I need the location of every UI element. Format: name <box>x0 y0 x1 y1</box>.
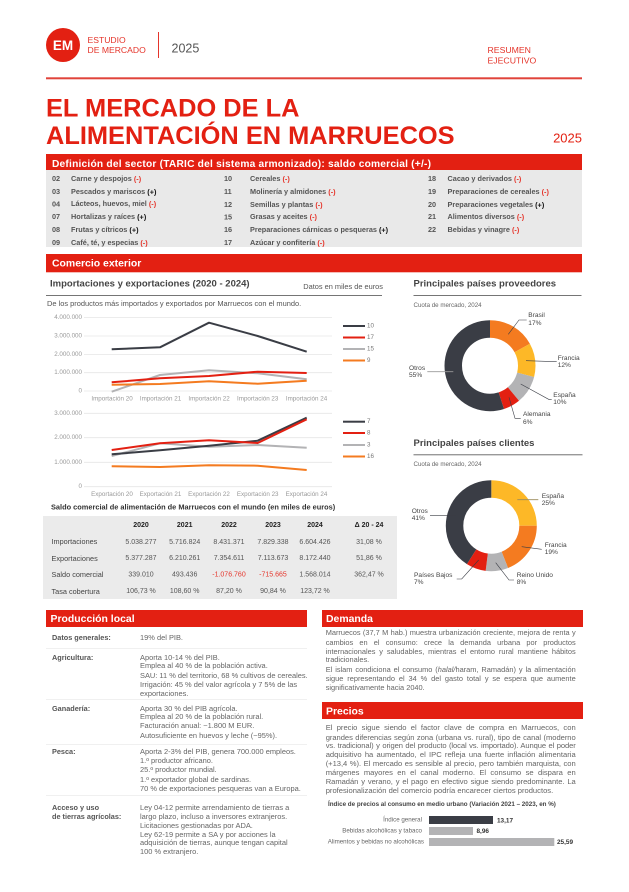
text: demand: tradicionales. <box>326 655 369 664</box>
donut chart: suppliers: Francia <box>558 355 580 362</box>
row: general data: Datos generales: <box>52 633 111 642</box>
line chart: exports <box>54 410 374 498</box>
logo: EM circle <box>46 28 80 62</box>
row: coverage: Tasa cobertura <box>52 587 101 596</box>
table header: 2022 <box>221 522 237 529</box>
row: exports: 5.377.287 <box>125 555 157 562</box>
sector list column 1: 08 <box>52 225 60 234</box>
line chart: exports: 2.000.000 <box>54 434 83 441</box>
sector list column 1 <box>52 174 157 247</box>
text: demand: internacionales y saludables, mientras el entorno rural mantiene hábitos <box>326 647 576 656</box>
row: agriculture <box>52 653 308 698</box>
row: livestock: Aporta 30 % del PIB agrícola. <box>140 704 238 713</box>
legend: exports: 7 <box>367 418 371 425</box>
table header: 2020 <box>133 522 149 529</box>
bar chart: price index: Alimentos y bebidas no alcohólicas <box>328 838 424 846</box>
row: agriculture: Irrigación: 45 % del valor agrícola y 7 5% de las <box>140 680 297 689</box>
sector list column 2: 17 <box>224 238 232 247</box>
donut chart: customers: España <box>542 493 564 500</box>
line chart: exports: Exportación 24 <box>286 491 328 498</box>
row: exports: Exportaciones <box>52 554 98 563</box>
heading: sector definition <box>46 154 582 170</box>
line chart: imports: Importación 22 <box>188 396 230 402</box>
row: balance: 1.568.014 <box>299 572 331 578</box>
heading: prices <box>322 702 583 719</box>
row: land access <box>52 803 290 856</box>
row: agriculture: Emplea al 40 % de la población activa. <box>140 661 268 670</box>
sector list column 2: Cereales (-) <box>250 174 290 183</box>
row: exports: 51,86 % <box>356 555 382 562</box>
row: balance: 339.010 <box>128 572 154 578</box>
row: land access: largo plazo, incluso a inversores extranjeros. <box>140 812 287 821</box>
row: coverage: 87,20 % <box>216 588 242 595</box>
sector list column 2 <box>224 174 389 247</box>
row: imports: 5.038.277 <box>125 539 157 546</box>
legend: exports <box>343 418 374 460</box>
donut chart: suppliers: Brasil <box>528 312 545 319</box>
row: imports <box>52 537 382 546</box>
sector list column 2: Molinería y almidones (-) <box>250 187 336 196</box>
header <box>46 28 582 79</box>
row: exports: 7.113.673 <box>258 555 288 562</box>
table header: Δ 20 - 24 <box>355 522 383 529</box>
row: land access: adquisición de tierras, aunque tengan capital <box>140 838 288 847</box>
heading: demand <box>322 610 583 627</box>
row: balance: -715.665 <box>259 572 287 578</box>
text: prices: grandes diferencias según zona (urbana vs. rural), tipo de canal (moderno <box>326 733 576 742</box>
donut chart: suppliers: 55% <box>409 372 422 379</box>
sector list column 2: 15 <box>224 212 232 222</box>
sector list column 3: 19 <box>428 187 436 196</box>
bar chart: price index <box>328 816 573 846</box>
row: agriculture: exportaciones. <box>140 689 188 698</box>
table header: 2024 <box>307 522 323 529</box>
line chart: exports: 1.000.000 <box>54 459 83 466</box>
row: coverage: 90,84 % <box>260 588 286 595</box>
donut chart: suppliers: Alemania <box>523 411 551 418</box>
sector list column 1: Carne y despojos (-) <box>71 174 142 183</box>
text: prices: márgenes mayores en el canal moderno. El consumo se dispara en <box>326 768 576 777</box>
legend: exports: 3 <box>367 442 371 448</box>
sector list column 2: 11 <box>224 187 232 196</box>
text: prices: (+13,4 %). El mercado es sensible al precio, pero también marquista, con <box>326 759 576 768</box>
title <box>46 94 455 150</box>
table header: 2023 <box>265 522 281 529</box>
sector list column 3: 20 <box>428 200 436 209</box>
table header <box>133 522 383 529</box>
heading: main customers: Principales países clientes <box>414 438 534 449</box>
note: market share suppliers: Cuota de mercado, 2024 <box>414 302 482 309</box>
panel: sector definition <box>46 154 582 247</box>
text: prices: Ramadán y verano, y el pago en efectivo sigue siendo predominante. La <box>326 777 576 786</box>
donut chart: suppliers: 10% <box>553 399 567 406</box>
text: prices: adquisitivo ha aumentado, el IPC refleja una fuerte inflación alimentaria <box>326 750 576 759</box>
row: livestock: Ganadería: <box>52 704 90 713</box>
row: land access: de tierras agrícolas: <box>52 812 121 821</box>
row: land access: Ley 04-12 permite arrendamiento de tierras a <box>140 803 290 812</box>
line chart: imports: Importación 23 <box>237 396 279 402</box>
heading: prices: Precios <box>326 706 364 718</box>
heading: local production <box>46 610 307 627</box>
row: land access: Acceso y uso <box>52 803 100 812</box>
donut chart: suppliers: España <box>553 392 576 399</box>
donut chart: customers: Otros <box>412 508 429 515</box>
sector list column 2: Azúcar y confitería (-) <box>250 238 325 247</box>
line chart: imports: 0 <box>79 388 83 394</box>
line chart: imports: Importación 20 <box>91 396 133 402</box>
text: demand <box>326 628 582 698</box>
legend: imports: 17 <box>367 334 374 341</box>
donut chart: suppliers: 12% <box>558 362 571 369</box>
sector list column 3: Preparaciones de cereales (-) <box>448 187 549 196</box>
sector list column 1: Frutas y cítricos (+) <box>71 225 139 234</box>
bar chart title: Índice de precios al consumo en medio urbano (Variación 2021 – 2023, en %) <box>328 800 556 808</box>
row: imports: 6.604.426 <box>299 539 331 546</box>
row: coverage: 123,72 % <box>300 588 330 595</box>
row: agriculture: Aporta 10-14 % del PIB. <box>140 653 220 662</box>
row: agriculture: Agricultura: <box>52 653 93 662</box>
table title: Saldo comercial de alimentación de Marruecos con el mundo (en miles de euros) <box>51 502 336 512</box>
sector list column 3: 22 <box>428 225 436 234</box>
sector list column 1: Hortalizas y raíces (+) <box>71 212 147 221</box>
row: balance <box>52 570 384 579</box>
legend: exports: 8 <box>367 430 371 436</box>
row: fishing: 25.º productor mundial. <box>140 765 217 774</box>
row: balance: 493.436 <box>172 572 197 578</box>
heading: main suppliers: Principales países proveedores <box>414 278 556 290</box>
bar chart: price index: 8,96 <box>476 828 489 835</box>
text: demand: sigue representando el 34 % del gasto total y se espera que aumente <box>326 674 576 683</box>
executive summary label: EJECUTIVO <box>488 56 536 66</box>
sector list column 3: Bebidas y vinagre (-) <box>448 225 520 234</box>
sector list column 1: 03 <box>52 187 60 196</box>
panel: local production <box>46 610 308 856</box>
heading: local production: Producción local <box>50 614 135 625</box>
sector list column 1: 04 <box>52 200 61 208</box>
row: livestock: Facturación anual: ~1.800 M EUR. <box>140 721 254 730</box>
donut chart: customers: Francia <box>545 542 567 549</box>
text: demand: Marruecos (37,7 M hab.) muestra urbanización creciente, mejora de renta y <box>326 628 576 637</box>
text: prices <box>326 722 582 798</box>
row: exports: 6.210.261 <box>169 555 200 562</box>
line chart: imports: Importación 21 <box>140 396 182 402</box>
row: land access: 100 % extranjero. <box>140 847 198 856</box>
text: demand: significativamente hacia 2040. <box>326 683 425 692</box>
row: fishing: 1.º productor africano. <box>140 756 213 765</box>
text: demand: El islam condiciona el consumo (halal/haram, Ramadán) y la alimentación <box>326 665 576 674</box>
sector list column 3: 21 <box>428 212 436 221</box>
row: imports: 31,08 % <box>356 539 382 546</box>
line chart: imports <box>54 314 374 402</box>
row: imports: 5.716.824 <box>169 539 200 546</box>
donut chart: customers <box>412 489 567 586</box>
donut chart: suppliers: 17% <box>528 320 542 327</box>
donut chart: customers: 7% <box>414 579 424 586</box>
sector list column 1: Lácteos, huevos, miel (-) <box>71 199 157 208</box>
row: coverage: 108,60 % <box>170 588 199 595</box>
row: imports: 7.829.338 <box>257 539 289 546</box>
donut chart: customers: Países Bajos <box>414 572 453 579</box>
line chart: exports: Exportación 22 <box>188 491 230 498</box>
row: livestock: Emplea al 20 % de la población rural. <box>140 712 263 721</box>
sector list column 1: Café, té, y especias (-) <box>71 238 148 247</box>
donut chart: customers: 25% <box>542 500 555 507</box>
text: prices: profesionalización del comercio podría encarecer ciertos productos. <box>326 786 553 795</box>
logo: EM circle: EM <box>53 38 73 53</box>
donut chart: customers: Reino Unido <box>517 572 553 579</box>
text: demand: cambios en el consumo: crece la demanda urbana por productos <box>326 638 576 647</box>
table header: 2021 <box>177 522 193 529</box>
sector list column 3: Alimentos diversos (-) <box>448 212 525 221</box>
donut chart: suppliers: 6% <box>523 419 533 426</box>
sector list column 2: Grasas y aceites (-) <box>250 212 318 221</box>
heading: foreign trade <box>46 254 582 272</box>
row: general data <box>52 633 183 642</box>
panel: demand <box>322 610 583 698</box>
row: balance: 362,47 % <box>354 572 384 578</box>
row: land access: Ley 62-19 permite a SA y por acciones la <box>140 830 276 839</box>
line chart: imports: 4.000.000 <box>54 314 83 321</box>
study label <box>88 35 146 55</box>
legend: exports: 16 <box>367 453 374 460</box>
row: balance: Saldo comercial <box>52 570 104 579</box>
line chart: exports: 0 <box>79 483 83 490</box>
sector list column 3: Cacao y derivados (-) <box>448 174 522 183</box>
line chart: exports: Exportación 20 <box>91 491 133 498</box>
title: EL MERCADO DE LA <box>46 94 299 122</box>
line chart: exports: Exportación 23 <box>237 491 279 498</box>
sector list column 3 <box>428 174 549 234</box>
sector list column 1: Pescados y mariscos (+) <box>71 187 157 196</box>
chart intro: De los productos más importados y exportados por Marruecos con el mundo. <box>47 299 301 308</box>
legend: imports: 10 <box>367 322 374 329</box>
row: fishing: 70 % de exportaciones pesqueras van a Europa. <box>140 784 301 793</box>
heading: imports and exports: Importaciones y exportaciones (2020 - 2024) <box>50 278 250 290</box>
line chart: exports: Exportación 21 <box>140 491 182 498</box>
donut chart: customers: 41% <box>412 515 425 522</box>
sector list column 3: 18 <box>428 174 436 183</box>
sector list column 2: 16 <box>224 225 232 234</box>
row: general data: 19% del PIB. <box>140 633 183 642</box>
row: livestock <box>52 704 277 740</box>
row: coverage <box>52 587 330 596</box>
line chart: imports: 3.000.000 <box>54 332 83 340</box>
executive summary label: RESUMEN <box>488 45 531 55</box>
row: exports: 8.172.440 <box>299 555 331 562</box>
sector list column 2: Preparaciones cárnicas o pesqueras (+) <box>250 225 389 234</box>
row: imports: 8.431.371 <box>213 539 245 546</box>
sector list column 1: 07 <box>52 212 60 221</box>
row: agriculture: SAU: 11 % del territorio, 68 % cultivos de cereales. <box>140 671 308 680</box>
bar chart: price index: Índice general <box>383 816 422 824</box>
text: prices: vs. tradicional) y origen del producto (local vs. importado). Aunque el poder <box>326 741 576 750</box>
heading: demand: Demanda <box>326 614 373 625</box>
panel: prices <box>322 702 583 846</box>
heading: foreign trade: Comercio exterior <box>52 258 141 270</box>
line chart: exports: 3.000.000 <box>54 410 83 417</box>
row: fishing: 1.º exportador global de sardinas. <box>140 775 251 784</box>
row: livestock: Autosuficiente en huevos y leche (~95%). <box>140 731 277 740</box>
line chart: imports: Importación 24 <box>286 396 328 402</box>
row: fishing: Pesca: <box>52 747 76 756</box>
title: ALIMENTACIÓN EN MARRUECOS <box>46 120 455 150</box>
line chart: imports: 1.000.000 <box>54 369 83 376</box>
row: exports <box>52 554 382 563</box>
heading: sector definition: Definición del sector (TARIC del sistema armonizado): saldo comercial (+/-) <box>52 159 431 170</box>
bar chart: price index: 13,17 <box>497 818 513 824</box>
table: trade balance <box>43 516 397 599</box>
note: market share customers: Cuota de mercado, 2024 <box>414 461 482 468</box>
title year: 2025 <box>553 130 582 146</box>
executive summary label <box>488 45 536 66</box>
text: prices: El precio sigue siendo el factor clave de compra en Marruecos, con <box>326 723 576 732</box>
sector list column 2: 10 <box>224 174 232 183</box>
sector list column 3: Preparaciones vegetales (+) <box>448 200 545 209</box>
sector list column 1: 09 <box>52 238 60 247</box>
study label: ESTUDIO <box>88 35 126 45</box>
row: balance: -1.076.760 <box>212 572 246 578</box>
row: land access: Licitaciones gestionadas por ADA. <box>140 821 253 830</box>
row: coverage: 106,73 % <box>126 588 156 595</box>
row: imports: Importaciones <box>52 537 98 546</box>
legend: imports: 15 <box>367 346 374 352</box>
unit note: Datos en miles de euros <box>303 282 383 291</box>
sector list column 1: 02 <box>52 174 60 183</box>
bar chart: price index: Bebidas alcohólicas y tabaco <box>342 828 423 834</box>
year: 2025 <box>172 42 199 56</box>
donut chart: suppliers <box>409 312 580 426</box>
study label: DE MERCADO <box>88 45 146 55</box>
donut chart: customers: 19% <box>545 549 558 556</box>
row: fishing: Aporta 2-3% del PIB, genera 700.000 empleos. <box>140 747 296 756</box>
legend: imports: 9 <box>367 357 371 364</box>
legend: imports <box>343 322 374 364</box>
line chart: imports: 2.000.000 <box>54 351 83 358</box>
donut chart: customers: 8% <box>517 579 526 586</box>
donut chart: suppliers: Otros <box>409 365 426 372</box>
sector list column 2: 12 <box>224 200 232 209</box>
bar chart: price index: 25,59 <box>557 839 573 846</box>
row: fishing <box>52 747 301 793</box>
row: exports: 7.354.611 <box>214 555 244 562</box>
sector list column 2: Semillas y plantas (-) <box>250 200 323 209</box>
